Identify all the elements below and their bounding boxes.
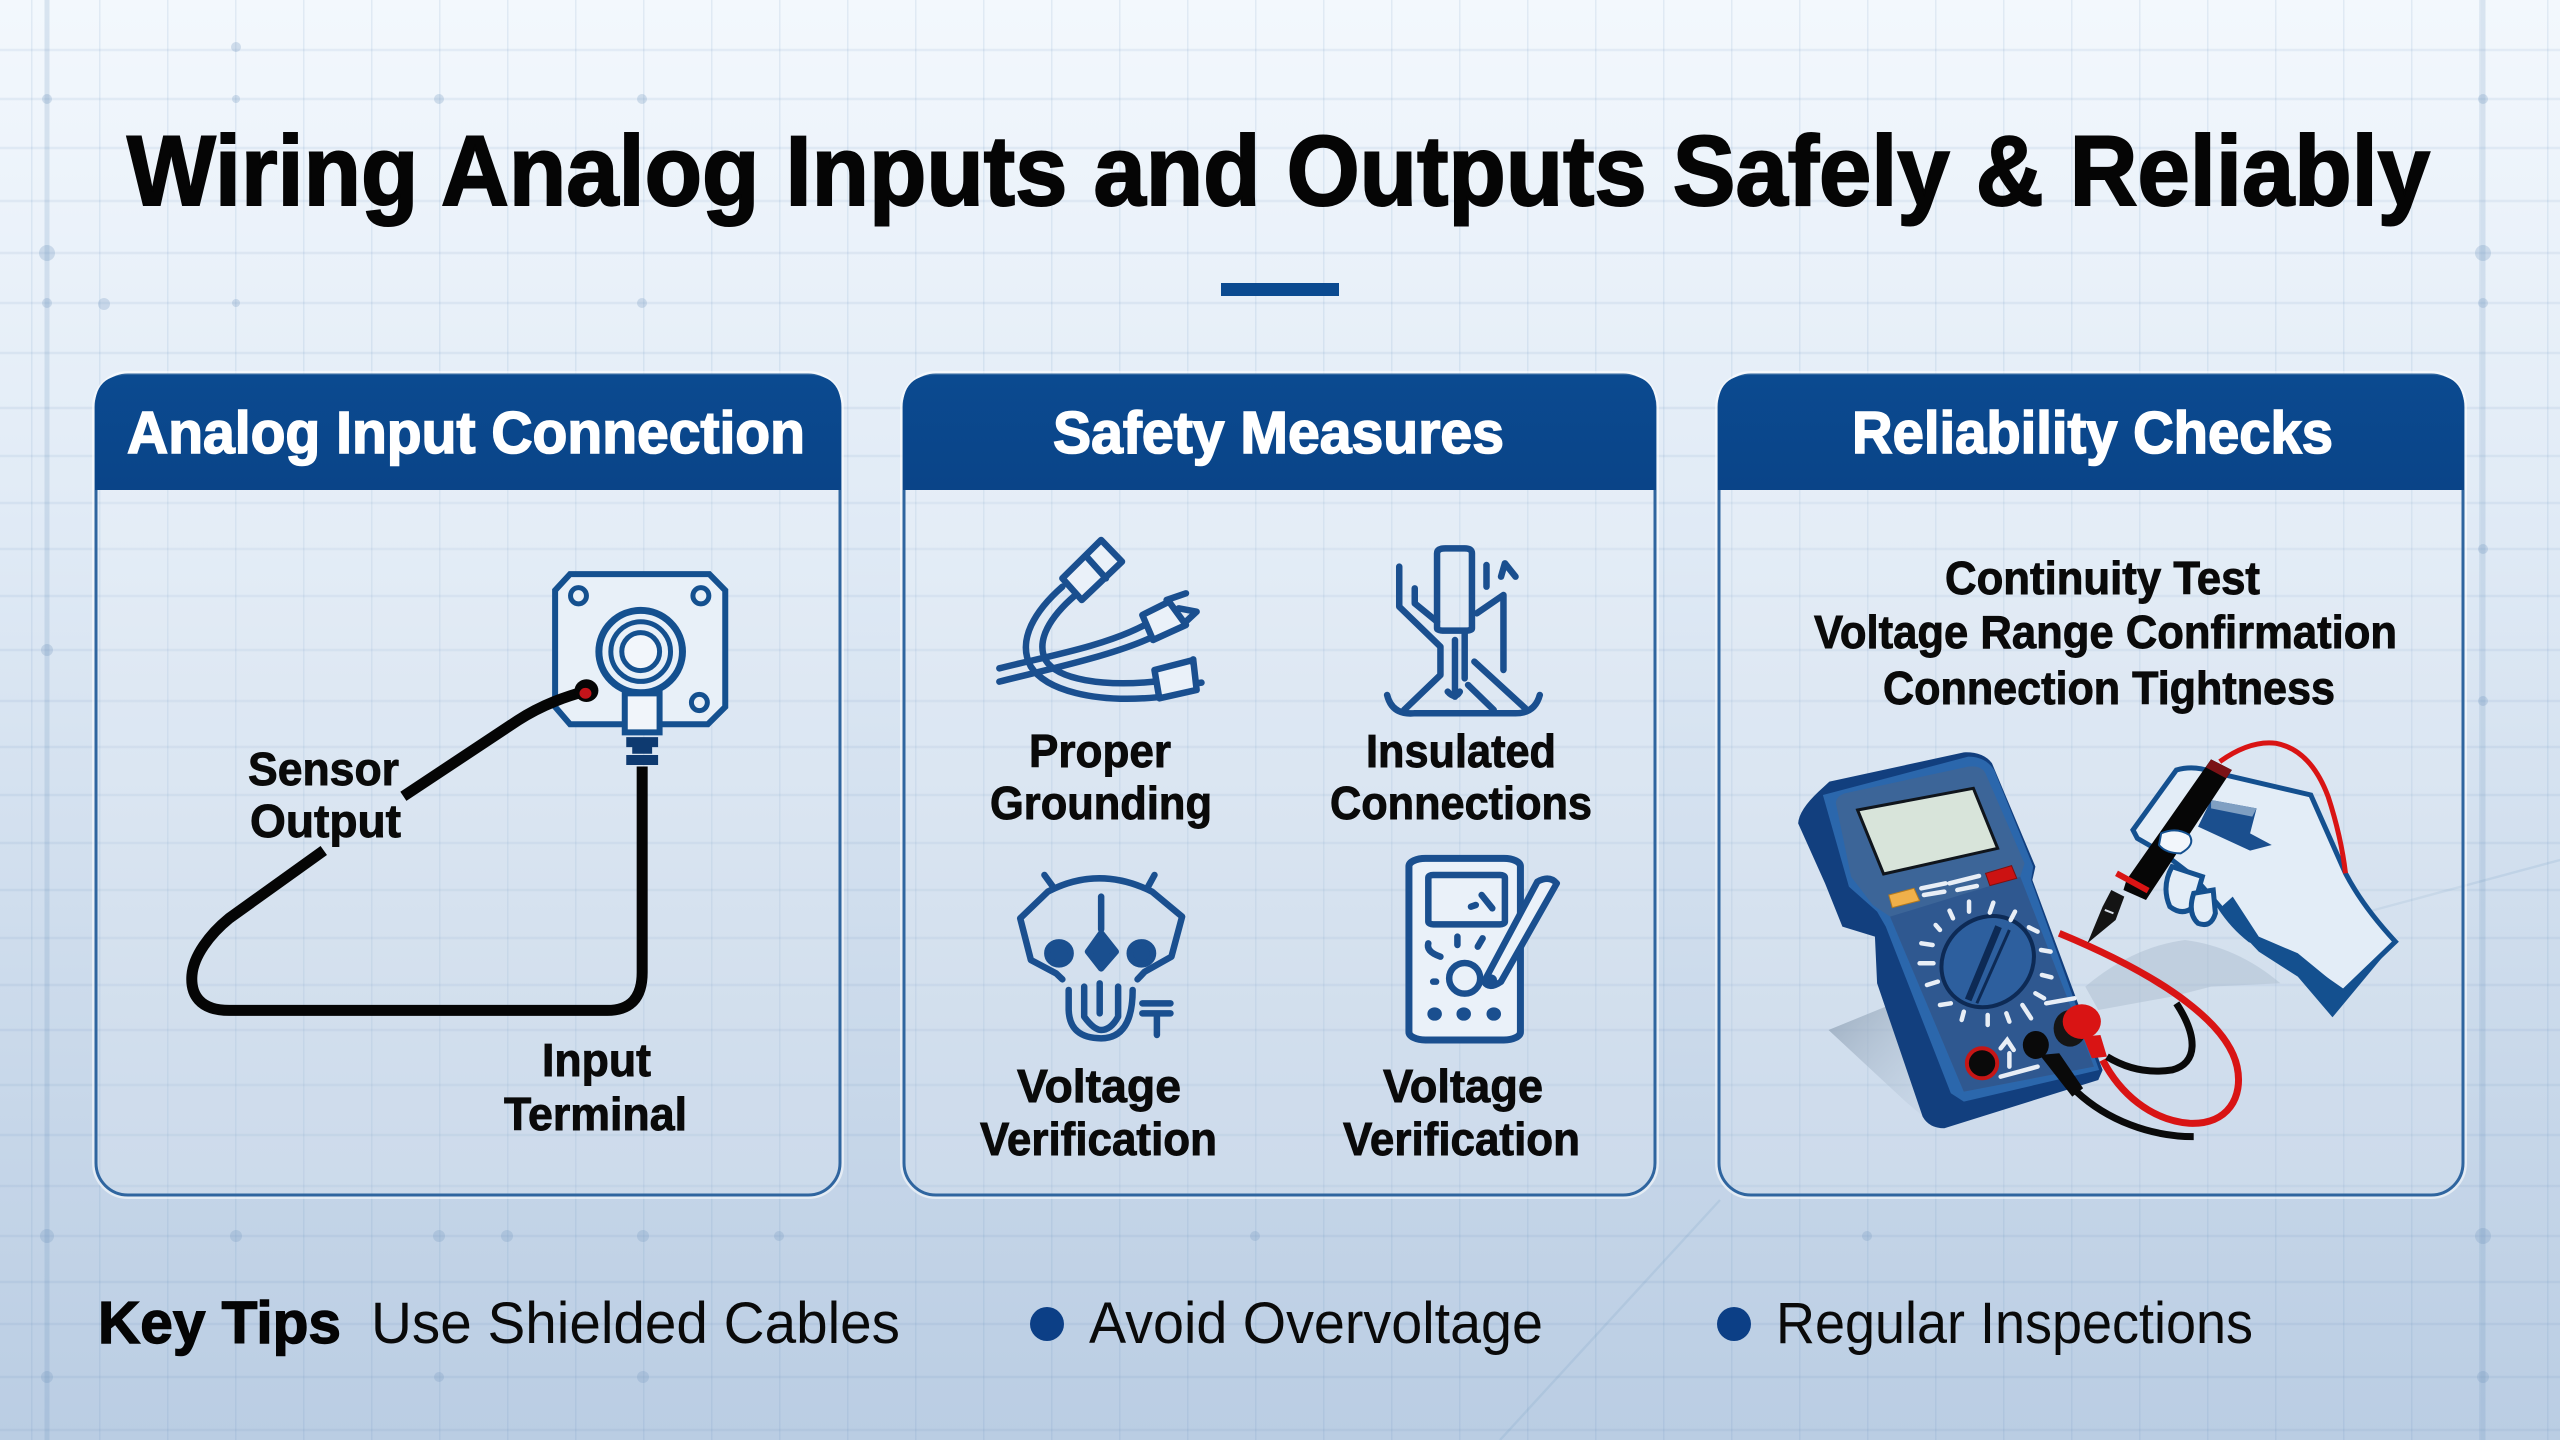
icon: proper grounding cables — [999, 540, 1201, 699]
meter shadow — [1829, 1007, 1933, 1125]
checklist text — [1814, 552, 2397, 714]
input cable — [192, 766, 642, 1010]
checklist text: Connection Tightness — [1883, 662, 2335, 714]
label: voltage verification — [1343, 1060, 1580, 1165]
label: input terminal: Terminal — [504, 1088, 687, 1140]
label: insulated connections: Connections — [1330, 777, 1592, 829]
label: proper grounding: Grounding — [990, 777, 1212, 829]
connection dot — [575, 679, 598, 702]
label: voltage verification: Verification — [1343, 1113, 1580, 1165]
label: input terminal — [504, 1034, 687, 1140]
label: insulated connections — [1330, 725, 1592, 829]
bullet — [1717, 1307, 1751, 1341]
illustration: multimeter and hand — [1798, 743, 2395, 1137]
checklist text: Continuity Test — [1945, 552, 2260, 604]
panel header: analog input connection: Analog Input Connection — [127, 400, 805, 466]
title accent bar — [1221, 283, 1339, 296]
checklist text: Voltage Range Confirmation — [1814, 606, 2397, 658]
sensor body — [555, 574, 725, 760]
hand — [2133, 768, 2395, 1017]
hand shadow — [2085, 940, 2280, 1010]
test probe — [2087, 743, 2345, 943]
multimeter body — [1798, 752, 2103, 1128]
tip: regular inspections: Regular Inspections — [1776, 1291, 2253, 1356]
sensor output cable — [403, 691, 587, 796]
panel: safety measures — [902, 373, 1657, 1197]
panel header: reliability checks: Reliability Checks — [1852, 400, 2333, 466]
label: input terminal: Input — [542, 1034, 651, 1086]
label: insulated connections: Insulated — [1366, 725, 1556, 777]
tip: use shielded cables: Use Shielded Cables — [371, 1291, 900, 1356]
test plugs — [2023, 1004, 2107, 1097]
panel header: safety measures: Safety Measures — [1053, 400, 1504, 466]
key tips row — [98, 1290, 2253, 1356]
label: voltage verification: Verification — [980, 1113, 1217, 1165]
label: voltage verification — [980, 1060, 1217, 1165]
icon: insulated connections — [1387, 548, 1540, 713]
icon: sensor with wiring — [192, 574, 725, 1010]
label: proper grounding — [990, 725, 1212, 829]
label: sensor output — [248, 743, 401, 847]
panel header: reliability checks — [1718, 375, 2464, 490]
icon: voltage verification plug — [1020, 875, 1182, 1038]
label: voltage verification: Voltage — [1017, 1060, 1181, 1112]
panel header: safety measures — [903, 375, 1656, 490]
panel: analog input connection — [94, 373, 842, 1197]
title: Wiring Analog Inputs and Outputs Safely & Reliably — [127, 115, 2430, 226]
tip: avoid overvoltage: Avoid Overvoltage — [1089, 1291, 1543, 1356]
label: sensor output: Sensor — [248, 743, 399, 795]
key tips heading: Key Tips — [98, 1290, 341, 1356]
black test lead — [2077, 1003, 2194, 1137]
bullet — [1030, 1307, 1064, 1341]
panel: reliability checks — [1717, 373, 2465, 1197]
label: proper grounding: Proper — [1029, 725, 1171, 777]
red test lead — [2059, 933, 2239, 1123]
icon: voltmeter with probe — [1409, 858, 1557, 1040]
panel header: analog input connection — [95, 375, 841, 490]
label: sensor output: Output — [250, 795, 401, 847]
label: voltage verification: Voltage — [1383, 1060, 1543, 1112]
